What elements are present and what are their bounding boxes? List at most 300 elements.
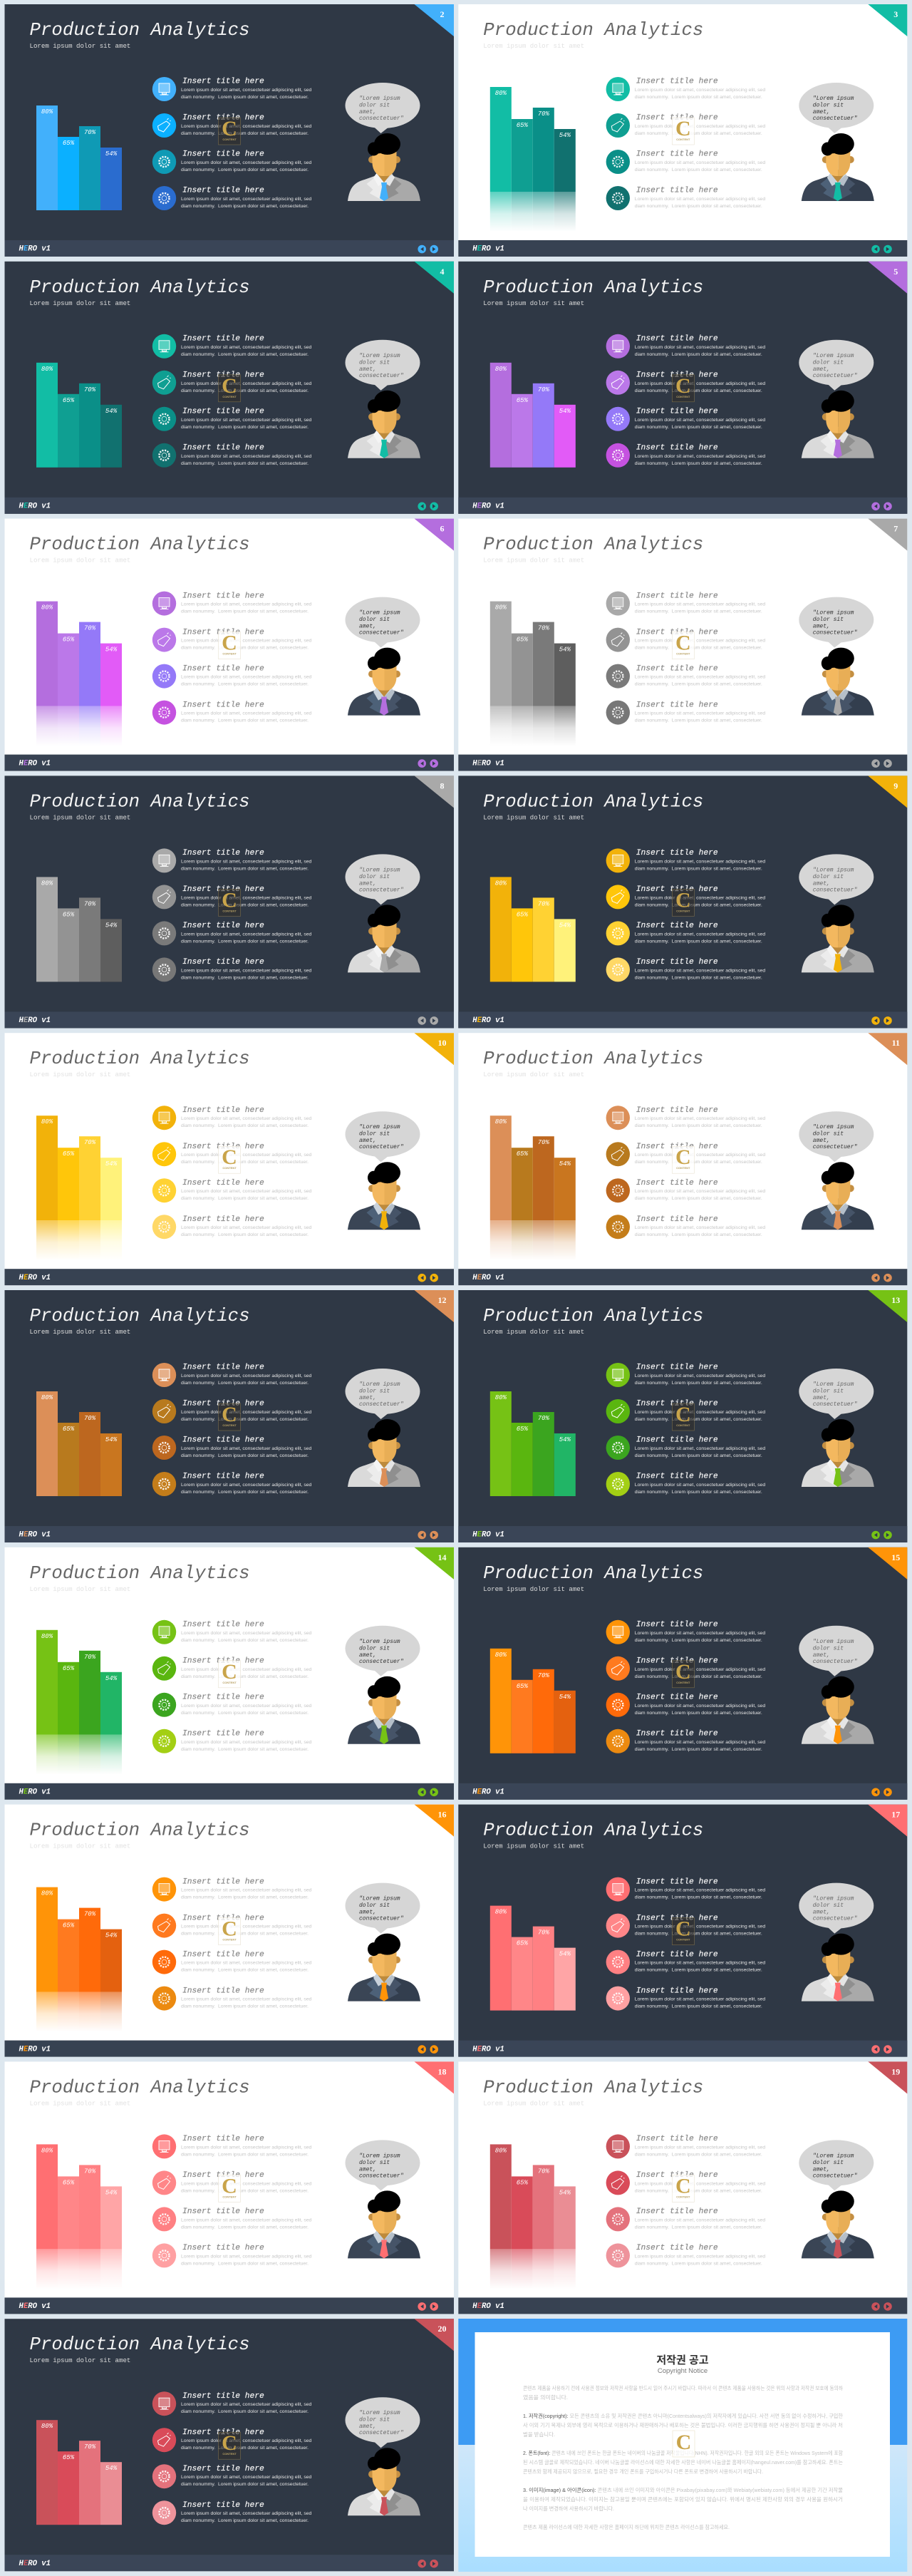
- item 2: Lorem ipsum dolor sit amet, consectetuer adipiscing elit, sed: [635, 2181, 765, 2186]
- speaker with quote: consectetuer": [359, 1144, 404, 1150]
- bar chart: 80%: [41, 366, 53, 373]
- footer: HERO v1: [19, 1531, 51, 1540]
- speaker with quote: consectetuer": [813, 373, 857, 379]
- watermark: [218, 1660, 241, 1688]
- bar chart: 54%: [105, 1160, 118, 1168]
- item 1: Insert title here: [636, 1364, 718, 1372]
- bar chart: [36, 363, 122, 468]
- page badge: 9: [893, 780, 898, 790]
- speaker with quote: "Lorem ipsum: [359, 96, 400, 102]
- speaker with quote: [345, 1626, 420, 1744]
- footer: [4, 1011, 454, 1028]
- bar chart: [489, 1116, 576, 1260]
- speaker with quote: dolor sit: [813, 1902, 844, 1909]
- subtitle: Lorem ipsum dolor sit amet: [483, 1328, 584, 1336]
- item 3: [606, 1436, 765, 1460]
- bar chart: 70%: [538, 1930, 550, 1937]
- item 3: Lorem ipsum dolor sit amet, consectetuer adipiscing elit, sed: [181, 160, 312, 165]
- item 4: [152, 186, 312, 210]
- item 3: Insert title here: [636, 922, 718, 930]
- item 4: [606, 1215, 765, 1239]
- watermark: C: [222, 1917, 237, 1941]
- page badge: 19: [891, 2066, 900, 2076]
- speaker with quote: consectetuer": [359, 373, 404, 379]
- speaker with quote: consectetuer": [359, 887, 404, 893]
- item 3: Lorem ipsum dolor sit amet, consectetuer adipiscing elit, sed: [635, 1961, 765, 1966]
- speaker with quote: consectetuer": [813, 887, 857, 893]
- bar chart: 70%: [538, 1672, 550, 1679]
- item 3: Lorem ipsum dolor sit amet, consectetuer adipiscing elit, sed: [181, 932, 312, 937]
- item 1: Insert title here: [182, 1106, 264, 1115]
- item 4: Lorem ipsum dolor sit amet, consectetuer adipiscing elit, sed: [635, 2254, 765, 2259]
- bar chart: 54%: [559, 1694, 571, 1701]
- item 2: [152, 1657, 312, 1681]
- item 1: Lorem ipsum dolor sit amet, consectetuer adipiscing elit, sed: [181, 345, 312, 350]
- bar chart: 65%: [517, 397, 529, 404]
- item 4: [606, 443, 765, 468]
- item 2: diam nonummy. Lorem ipsum dolor sit amet, consectetuer.: [181, 131, 309, 136]
- item 4: [152, 1729, 312, 1753]
- item 1: diam nonummy. Lorem ipsum dolor sit amet, consectetuer.: [181, 1123, 309, 1128]
- item 2: Insert title here: [636, 1143, 718, 1151]
- footer: [4, 1783, 454, 1800]
- notice body: 사 이외 기기 복제나 외부에 영리 목적으로 이용하거나 재판매하거나 배포하는 것은 불법입니다. 이러한 금지행위를 하면 사용권이 정지될 뿐 아니라 처: [523, 2422, 843, 2428]
- item 4: Insert title here: [636, 2244, 718, 2252]
- watermark: [672, 888, 694, 916]
- item 2: [606, 628, 765, 652]
- item 1: diam nonummy. Lorem ipsum dolor sit amet, consectetuer.: [635, 609, 762, 614]
- item 4: diam nonummy. Lorem ipsum dolor sit amet, consectetuer.: [181, 2261, 309, 2266]
- slide 4: dark teal: [4, 262, 454, 514]
- title: Production Analytics: [30, 1049, 250, 1069]
- title: Production Analytics: [30, 1820, 250, 1841]
- item 1: [606, 1620, 765, 1644]
- item 2: [152, 2170, 312, 2195]
- item 3: Insert title here: [182, 150, 264, 159]
- footer: HERO v1: [472, 2302, 504, 2311]
- bar chart: 80%: [41, 880, 53, 887]
- item 1: Lorem ipsum dolor sit amet, consectetuer adipiscing elit, sed: [635, 1374, 765, 1379]
- footer: [4, 2041, 454, 2057]
- item 4: [152, 2500, 312, 2525]
- item 2: Lorem ipsum dolor sit amet, consectetuer adipiscing elit, sed: [181, 2438, 312, 2443]
- bar chart: 70%: [538, 1139, 550, 1146]
- item 2: [152, 113, 312, 138]
- item 4: diam nonummy. Lorem ipsum dolor sit amet, consectetuer.: [181, 975, 309, 980]
- bar chart: 54%: [105, 2189, 118, 2196]
- speaker with quote: [345, 340, 420, 458]
- speaker with quote: [345, 2140, 420, 2258]
- item 4: diam nonummy. Lorem ipsum dolor sit amet, consectetuer.: [181, 1232, 309, 1237]
- item 3: [606, 150, 765, 174]
- page badge: 6: [440, 524, 445, 534]
- bar chart: 70%: [538, 2168, 550, 2175]
- item 3: Insert title here: [182, 1694, 264, 1702]
- watermark: C: [222, 117, 237, 140]
- watermark: C: [222, 1660, 237, 1684]
- item 3: Lorem ipsum dolor sit amet, consectetuer adipiscing elit, sed: [635, 418, 765, 423]
- bar chart: 80%: [41, 1633, 53, 1640]
- item 4: Insert title here: [636, 1473, 718, 1481]
- item 2: Lorem ipsum dolor sit amet, consectetuer adipiscing elit, sed: [635, 1667, 765, 1672]
- speaker with quote: amet,: [359, 2423, 376, 2430]
- subtitle: Lorem ipsum dolor sit amet: [30, 1071, 130, 1078]
- item 1: [606, 1363, 765, 1387]
- notice body: 3. 이미지(image) & 아이콘(icon): 콘텐츠 내에 쓰인 이미지와 아이콘은 Pixabay(pixabay.com)와 Webiaty(webiaty.com) 등에서 제공한 기간 저작물: [523, 2487, 843, 2493]
- slide 10: white yellow: [4, 1033, 454, 1285]
- item 2: Insert title here: [182, 1914, 264, 1922]
- item 4: diam nonummy. Lorem ipsum dolor sit amet, consectetuer.: [635, 975, 762, 980]
- item 2: diam nonummy. Lorem ipsum dolor sit amet, consectetuer.: [181, 2446, 309, 2451]
- item 1: diam nonummy. Lorem ipsum dolor sit amet, consectetuer.: [181, 352, 309, 357]
- bar chart: 54%: [105, 150, 118, 158]
- item 1: diam nonummy. Lorem ipsum dolor sit amet, consectetuer.: [181, 609, 309, 614]
- item 4: Insert title here: [636, 443, 718, 452]
- item 1: Insert title here: [182, 334, 264, 343]
- watermark: CONTENT: [676, 138, 690, 141]
- footer: HERO v1: [19, 502, 51, 510]
- slide 5: dark purple: [458, 262, 907, 514]
- item 3: Insert title here: [182, 2207, 264, 2216]
- page badge: [415, 262, 454, 294]
- item 1: Insert title here: [636, 78, 718, 86]
- item 3: Lorem ipsum dolor sit amet, consectetuer adipiscing elit, sed: [181, 2217, 312, 2222]
- item 4: [152, 957, 312, 982]
- watermark: CONTENT: [222, 2452, 237, 2456]
- item 4: Lorem ipsum dolor sit amet, consectetuer adipiscing elit, sed: [635, 1997, 765, 2002]
- page badge: 12: [437, 1295, 446, 1305]
- bar chart: 54%: [559, 646, 571, 654]
- item 3: Insert title here: [182, 922, 264, 930]
- item 2: Insert title here: [182, 114, 264, 123]
- notice body: 2. 폰트(font): 콘텐츠 내에 쓰인 폰트는 한글 폰트는 네이버의 나눔글꼴 저작물입니다(NHN). 저작권자입니다. 한글 외의 모든 폰트는 Windows System에 포함: [523, 2450, 843, 2456]
- item 2: Lorem ipsum dolor sit amet, consectetuer adipiscing elit, sed: [181, 639, 312, 644]
- bar chart: 70%: [84, 900, 96, 907]
- speaker with quote: consectetuer": [359, 630, 404, 637]
- watermark: CONTENT: [676, 909, 690, 912]
- item 1: Lorem ipsum dolor sit amet, consectetuer adipiscing elit, sed: [635, 88, 765, 93]
- bar chart: 65%: [63, 911, 75, 918]
- footer: HERO v1: [19, 2302, 51, 2311]
- item 2: Lorem ipsum dolor sit amet, consectetuer adipiscing elit, sed: [181, 895, 312, 900]
- bar chart: 80%: [495, 880, 507, 887]
- subtitle: Lorem ipsum dolor sit amet: [483, 42, 584, 50]
- speaker with quote: amet,: [359, 366, 376, 373]
- item 1: [152, 1877, 312, 1902]
- speaker with quote: dolor sit: [359, 103, 390, 108]
- item 3: Insert title here: [182, 664, 264, 673]
- bar chart: [36, 2144, 123, 2289]
- speaker with quote: [799, 597, 874, 716]
- item 4: Insert title here: [636, 1987, 718, 1995]
- title: Production Analytics: [483, 20, 703, 41]
- item 2: Insert title here: [636, 885, 718, 894]
- item 1: Lorem ipsum dolor sit amet, consectetuer adipiscing elit, sed: [635, 602, 765, 607]
- item 1: Insert title here: [182, 592, 264, 600]
- item 3: Insert title here: [182, 407, 264, 416]
- notice body: 였음을 의미합니다.: [523, 2394, 568, 2401]
- watermark: [672, 1145, 694, 1173]
- bar chart: 80%: [41, 108, 53, 115]
- item 4: Lorem ipsum dolor sit amet, consectetuer adipiscing elit, sed: [181, 197, 312, 202]
- title: Production Analytics: [483, 1563, 703, 1584]
- speaker with quote: amet,: [359, 624, 376, 630]
- item 4: Insert title here: [636, 1215, 718, 1224]
- item 1: Insert title here: [636, 1106, 718, 1115]
- watermark: C: [676, 2431, 691, 2454]
- item 1: Insert title here: [636, 2135, 718, 2143]
- notice body: 을 이용하여 제작되었습니다. 이미지는 참고용일 뿐이며 콘텐츠에는 포함되어 있지 않습니다. 위에서 명시된 제한사항 외의 경우 사용을 원하시거: [523, 2496, 843, 2503]
- item 3: Lorem ipsum dolor sit amet, consectetuer adipiscing elit, sed: [635, 160, 765, 165]
- bar chart: 65%: [63, 637, 75, 644]
- watermark: CONTENT: [676, 1166, 690, 1170]
- bar chart: 80%: [41, 1890, 53, 1897]
- item 4: [606, 1472, 765, 1496]
- speaker with quote: consectetuer": [359, 2173, 404, 2179]
- item 4: diam nonummy. Lorem ipsum dolor sit amet, consectetuer.: [181, 461, 309, 466]
- footer: [4, 2297, 454, 2314]
- watermark: [673, 2431, 695, 2457]
- item 4: Insert title here: [182, 1473, 264, 1481]
- footer: [4, 755, 454, 771]
- watermark: C: [675, 2174, 691, 2198]
- item 2: [152, 628, 312, 652]
- watermark: CONTENT: [676, 395, 690, 398]
- page badge: [868, 2061, 907, 2093]
- bar chart: 65%: [517, 1426, 529, 1433]
- item 1: Insert title here: [636, 334, 718, 343]
- speaker with quote: amet,: [813, 366, 830, 373]
- item 4: diam nonummy. Lorem ipsum dolor sit amet, consectetuer.: [635, 2261, 762, 2266]
- item 1: [606, 592, 765, 616]
- item 4: diam nonummy. Lorem ipsum dolor sit amet, consectetuer.: [635, 204, 762, 209]
- bar chart: 70%: [84, 129, 96, 136]
- item 3: diam nonummy. Lorem ipsum dolor sit amet, consectetuer.: [635, 1968, 762, 1973]
- item 4: Lorem ipsum dolor sit amet, consectetuer adipiscing elit, sed: [635, 1483, 765, 1488]
- item 2: [152, 371, 312, 395]
- subtitle: Lorem ipsum dolor sit amet: [483, 1843, 584, 1850]
- bar chart: 70%: [84, 1415, 96, 1422]
- item 3: [606, 407, 765, 431]
- speaker with quote: "Lorem ipsum: [813, 1381, 854, 1388]
- speaker with quote: dolor sit: [359, 359, 390, 366]
- item 1: Lorem ipsum dolor sit amet, consectetuer adipiscing elit, sed: [635, 345, 765, 350]
- item 2: Lorem ipsum dolor sit amet, consectetuer adipiscing elit, sed: [635, 381, 765, 386]
- item 4: Insert title here: [182, 2501, 264, 2510]
- speaker with quote: amet,: [359, 2166, 376, 2173]
- item 3: [152, 1950, 312, 1974]
- watermark: C: [222, 888, 237, 912]
- item 1: Lorem ipsum dolor sit amet, consectetuer adipiscing elit, sed: [181, 1631, 312, 1636]
- item 1: [152, 1106, 312, 1130]
- speaker with quote: "Lorem ipsum: [813, 610, 854, 617]
- bar chart: 80%: [495, 1118, 507, 1125]
- item 2: Insert title here: [182, 371, 264, 379]
- item 3: Insert title here: [636, 150, 718, 159]
- item 2: Insert title here: [636, 1657, 718, 1666]
- watermark: CONTENT: [222, 1938, 237, 1942]
- item 3: diam nonummy. Lorem ipsum dolor sit amet, consectetuer.: [635, 939, 762, 944]
- watermark: C: [675, 374, 691, 398]
- speaker with quote: amet,: [813, 1395, 830, 1401]
- item 3: Lorem ipsum dolor sit amet, consectetuer adipiscing elit, sed: [635, 1446, 765, 1451]
- bar chart: [36, 1391, 122, 1496]
- footer: HERO v1: [472, 1016, 504, 1025]
- slide 6: white purple: [4, 519, 454, 771]
- item 4: [606, 957, 765, 982]
- page badge: 20: [437, 2324, 446, 2334]
- item 2: Insert title here: [636, 1914, 718, 1922]
- item 1: Insert title here: [182, 78, 264, 86]
- watermark: [218, 2174, 241, 2202]
- speaker with quote: amet,: [359, 109, 376, 115]
- bar chart: 70%: [84, 2443, 96, 2451]
- item 2: diam nonummy. Lorem ipsum dolor sit amet, consectetuer.: [181, 646, 309, 651]
- item 4: Insert title here: [636, 1730, 718, 1738]
- item 4: Lorem ipsum dolor sit amet, consectetuer adipiscing elit, sed: [635, 1225, 765, 1230]
- item 2: diam nonummy. Lorem ipsum dolor sit amet, consectetuer.: [635, 1417, 762, 1422]
- speaker with quote: "Lorem ipsum: [359, 353, 400, 359]
- page badge: 11: [892, 1038, 900, 1048]
- item 3: diam nonummy. Lorem ipsum dolor sit amet, consectetuer.: [181, 939, 309, 944]
- item 3: Insert title here: [636, 1694, 718, 1702]
- item 3: diam nonummy. Lorem ipsum dolor sit amet, consectetuer.: [181, 1196, 309, 1201]
- speaker with quote: "Lorem ipsum: [813, 1896, 854, 1902]
- item 4: Insert title here: [182, 1215, 264, 1224]
- item 4: diam nonummy. Lorem ipsum dolor sit amet, consectetuer.: [181, 2518, 309, 2523]
- item 1: diam nonummy. Lorem ipsum dolor sit amet, consectetuer.: [181, 2409, 309, 2414]
- title: Production Analytics: [483, 535, 703, 555]
- item 1: Insert title here: [182, 1621, 264, 1629]
- footer: HERO v1: [472, 245, 504, 254]
- bar chart: [490, 1906, 576, 2011]
- item 4: diam nonummy. Lorem ipsum dolor sit amet, consectetuer.: [635, 1232, 762, 1237]
- bar chart: [490, 1391, 576, 1496]
- subtitle: Lorem ipsum dolor sit amet: [30, 557, 130, 565]
- item 3: diam nonummy. Lorem ipsum dolor sit amet, consectetuer.: [181, 425, 309, 430]
- speaker with quote: "Lorem ipsum: [813, 1124, 854, 1130]
- item 4: Lorem ipsum dolor sit amet, consectetuer adipiscing elit, sed: [181, 1997, 312, 2002]
- watermark: [672, 374, 694, 402]
- item 2: Insert title here: [182, 2428, 264, 2437]
- item 4: Insert title here: [182, 958, 264, 967]
- subtitle: Lorem ipsum dolor sit amet: [30, 1328, 130, 1336]
- subtitle: Lorem ipsum dolor sit amet: [483, 299, 584, 307]
- watermark: [672, 632, 694, 659]
- slide 8: dark gray: [4, 776, 454, 1028]
- watermark: CONTENT: [222, 909, 237, 912]
- speaker with quote: [799, 340, 874, 458]
- footer: [458, 2297, 907, 2314]
- footer: [458, 1269, 907, 1285]
- item 4: [606, 186, 765, 210]
- page badge: 5: [893, 267, 898, 277]
- item 1: Insert title here: [182, 849, 264, 857]
- speaker with quote: "Lorem ipsum: [359, 2410, 400, 2416]
- watermark: [218, 888, 241, 916]
- title: Production Analytics: [483, 1049, 703, 1069]
- watermark: [218, 1403, 241, 1431]
- footer: HERO v1: [19, 1788, 51, 1797]
- bar chart: [490, 1649, 576, 1753]
- title: Production Analytics: [483, 2077, 703, 2098]
- item 3: [606, 921, 765, 945]
- item 1: [152, 2391, 312, 2416]
- item 1: diam nonummy. Lorem ipsum dolor sit amet, consectetuer.: [181, 2152, 309, 2157]
- item 2: Insert title here: [182, 2171, 264, 2180]
- watermark: [218, 117, 241, 145]
- item 2: diam nonummy. Lorem ipsum dolor sit amet, consectetuer.: [635, 1932, 762, 1937]
- bar chart: [36, 1116, 123, 1260]
- notice body: 된 시스템 글꼴로 제작되었습니다. 네이버 나눔글꼴 라이선스에 대한 자세한 사항은 네이버 나눔글꼴 홈페이지(hangeul.naver.com)를 참고하세요. 폰트는: [523, 2459, 843, 2466]
- watermark: CONTENT: [676, 1938, 690, 1942]
- item 1: diam nonummy. Lorem ipsum dolor sit amet, consectetuer.: [181, 1895, 309, 1900]
- speaker with quote: consectetuer": [813, 115, 857, 122]
- footer: [458, 240, 907, 257]
- speaker with quote: dolor sit: [359, 874, 390, 880]
- item 2: Lorem ipsum dolor sit amet, consectetuer adipiscing elit, sed: [181, 381, 312, 386]
- page badge: 7: [893, 524, 898, 534]
- footer: [4, 240, 454, 257]
- bar chart: 54%: [559, 1436, 571, 1443]
- watermark: C: [675, 1917, 691, 1941]
- slide 11: white brown: [458, 1033, 907, 1285]
- page badge: 17: [891, 1810, 900, 1820]
- bar chart: 70%: [84, 1911, 96, 1918]
- subtitle: Lorem ipsum dolor sit amet: [483, 557, 584, 565]
- subtitle: Lorem ipsum dolor sit amet: [483, 2099, 584, 2107]
- bar chart: [489, 87, 576, 232]
- item 3: diam nonummy. Lorem ipsum dolor sit amet, consectetuer.: [181, 2482, 309, 2487]
- item 2: Insert title here: [636, 114, 718, 123]
- item 2: Lorem ipsum dolor sit amet, consectetuer adipiscing elit, sed: [635, 639, 765, 644]
- speaker with quote: "Lorem ipsum: [813, 1639, 854, 1645]
- speaker with quote: amet,: [359, 1138, 376, 1144]
- panel: copyright notice: [458, 2319, 907, 2572]
- page badge: [868, 519, 907, 551]
- speaker with quote: [345, 83, 420, 201]
- item 4: Insert title here: [182, 1730, 264, 1738]
- bar chart: 65%: [517, 911, 529, 918]
- bar chart: 70%: [538, 625, 550, 632]
- item 1: diam nonummy. Lorem ipsum dolor sit amet, consectetuer.: [635, 1381, 762, 1386]
- speaker with quote: dolor sit: [359, 2417, 390, 2423]
- item 1: diam nonummy. Lorem ipsum dolor sit amet, consectetuer.: [635, 1895, 762, 1900]
- title: Production Analytics: [483, 791, 703, 812]
- item 4: diam nonummy. Lorem ipsum dolor sit amet, consectetuer.: [635, 461, 762, 466]
- speaker with quote: amet,: [813, 109, 830, 115]
- bar chart: 54%: [105, 1675, 118, 1682]
- item 2: Insert title here: [182, 628, 264, 637]
- bar chart: 80%: [495, 90, 507, 97]
- notice body: [523, 2385, 843, 2530]
- item 3: [152, 150, 312, 174]
- item 1: Lorem ipsum dolor sit amet, consectetuer adipiscing elit, sed: [181, 602, 312, 607]
- speaker with quote: consectetuer": [813, 1401, 857, 1408]
- item 3: [152, 664, 312, 689]
- item 1: [606, 334, 765, 359]
- item 2: [152, 1399, 312, 1423]
- speaker with quote: [799, 1626, 874, 1744]
- item 1: Lorem ipsum dolor sit amet, consectetuer adipiscing elit, sed: [635, 1116, 765, 1121]
- item 2: Lorem ipsum dolor sit amet, consectetuer adipiscing elit, sed: [181, 1667, 312, 1672]
- bar chart: 65%: [517, 122, 529, 129]
- title: Production Analytics: [30, 2334, 250, 2355]
- item 1: Lorem ipsum dolor sit amet, consectetuer adipiscing elit, sed: [181, 88, 312, 93]
- item 1: Insert title here: [636, 1877, 718, 1886]
- item 2: Lorem ipsum dolor sit amet, consectetuer adipiscing elit, sed: [181, 1925, 312, 1930]
- item 3: Lorem ipsum dolor sit amet, consectetuer adipiscing elit, sed: [181, 1446, 312, 1451]
